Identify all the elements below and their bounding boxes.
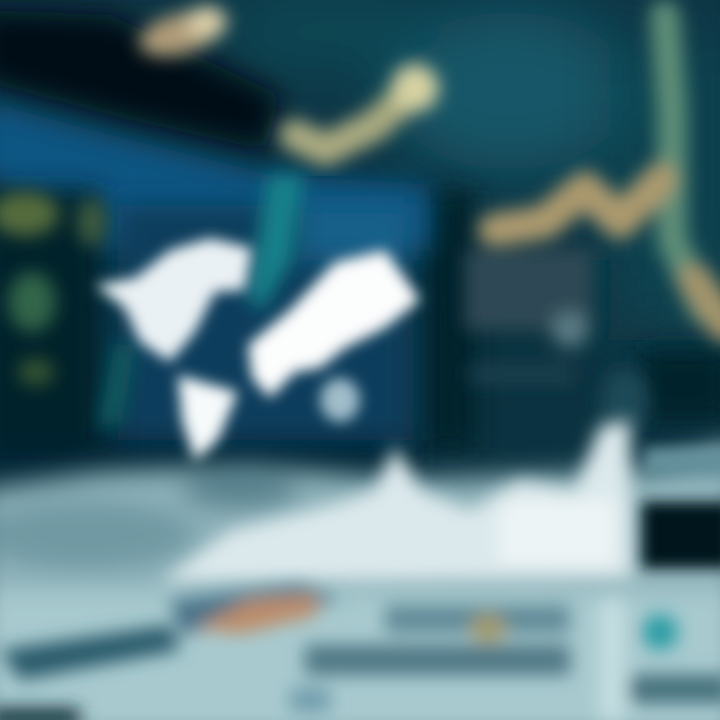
panel: world map background bbox=[0, 190, 420, 470]
chart: white area chart bbox=[160, 420, 632, 582]
panel: left data panel bbox=[0, 192, 107, 385]
chart: grey data panel on the right bbox=[465, 250, 649, 432]
panel: black block at right edge bbox=[642, 448, 720, 568]
icon: gold blob top bbox=[134, 4, 227, 64]
icon: teal vertical bar bbox=[98, 175, 304, 430]
panel: dark teal sky background bbox=[0, 0, 720, 340]
chart: gold line upper centre bbox=[295, 64, 439, 150]
panel: blue band bbox=[0, 100, 430, 250]
map: white continents bbox=[95, 238, 420, 462]
panel: pale lower ground bbox=[0, 440, 720, 720]
panel: black diagonal shadow bbox=[0, 10, 720, 450]
chart: gold line on the right bbox=[495, 15, 720, 325]
chart: lower dashboard strips bbox=[0, 585, 720, 720]
